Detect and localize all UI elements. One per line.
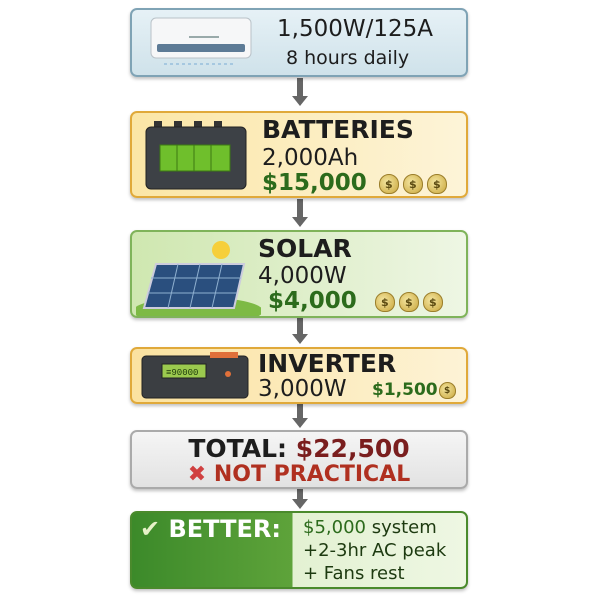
panel: batteries: $ bbox=[385, 178, 393, 190]
panel: batteries: 2,000Ah bbox=[262, 145, 358, 171]
panel: batteries bbox=[130, 111, 468, 198]
panel: batteries: $15,000 bbox=[262, 170, 367, 196]
panel: inverter: $ bbox=[444, 386, 450, 396]
text: solar: SOLAR bbox=[258, 234, 352, 263]
panel: inverter: $1,500 bbox=[372, 380, 438, 400]
text: better details: + Fans rest bbox=[303, 563, 405, 584]
arrow 3 bbox=[292, 318, 308, 344]
arrow 1 bbox=[292, 78, 308, 106]
text: batteries: BATTERIES bbox=[262, 115, 414, 144]
text: better details bbox=[303, 517, 446, 584]
panel: solar: $ bbox=[405, 296, 413, 308]
text: total: TOTAL: $22,500 bbox=[188, 434, 410, 463]
panel: inverter bbox=[130, 347, 468, 404]
panel: AC load: 8 hours daily bbox=[286, 47, 409, 69]
arrow 2 bbox=[292, 199, 308, 227]
panel: total bbox=[130, 430, 468, 489]
icon: inverter: ≡90000 bbox=[166, 368, 198, 378]
text: better: ✔ BETTER: bbox=[140, 515, 281, 543]
panel: solar: $4,000 bbox=[268, 288, 357, 314]
icon: battery bbox=[146, 121, 246, 190]
arrow 4 bbox=[292, 404, 308, 428]
panel: batteries: $ bbox=[433, 178, 441, 190]
text: load: 1,500W/125A bbox=[277, 16, 433, 42]
panel: solar bbox=[130, 230, 468, 318]
text: inverter: INVERTER bbox=[258, 349, 396, 378]
icon: inverter bbox=[142, 352, 248, 398]
panel: inverter: 3,000W bbox=[258, 376, 347, 402]
icon: air conditioner bbox=[150, 18, 252, 65]
text: not practical: ✖ NOT PRACTICAL bbox=[188, 462, 410, 487]
icon: solar panel bbox=[136, 241, 261, 316]
arrow 5 bbox=[292, 489, 308, 509]
panel: solar: $ bbox=[381, 296, 389, 308]
panel: batteries: $ bbox=[409, 178, 417, 190]
panel: better bbox=[130, 511, 468, 589]
text: better details: $5,000 system bbox=[303, 517, 437, 538]
panel: solar: 4,000W bbox=[258, 263, 347, 289]
text: better details: +2-3hr AC peak bbox=[303, 540, 446, 561]
panel: AC load bbox=[130, 8, 468, 77]
panel: solar: $ bbox=[429, 296, 437, 308]
